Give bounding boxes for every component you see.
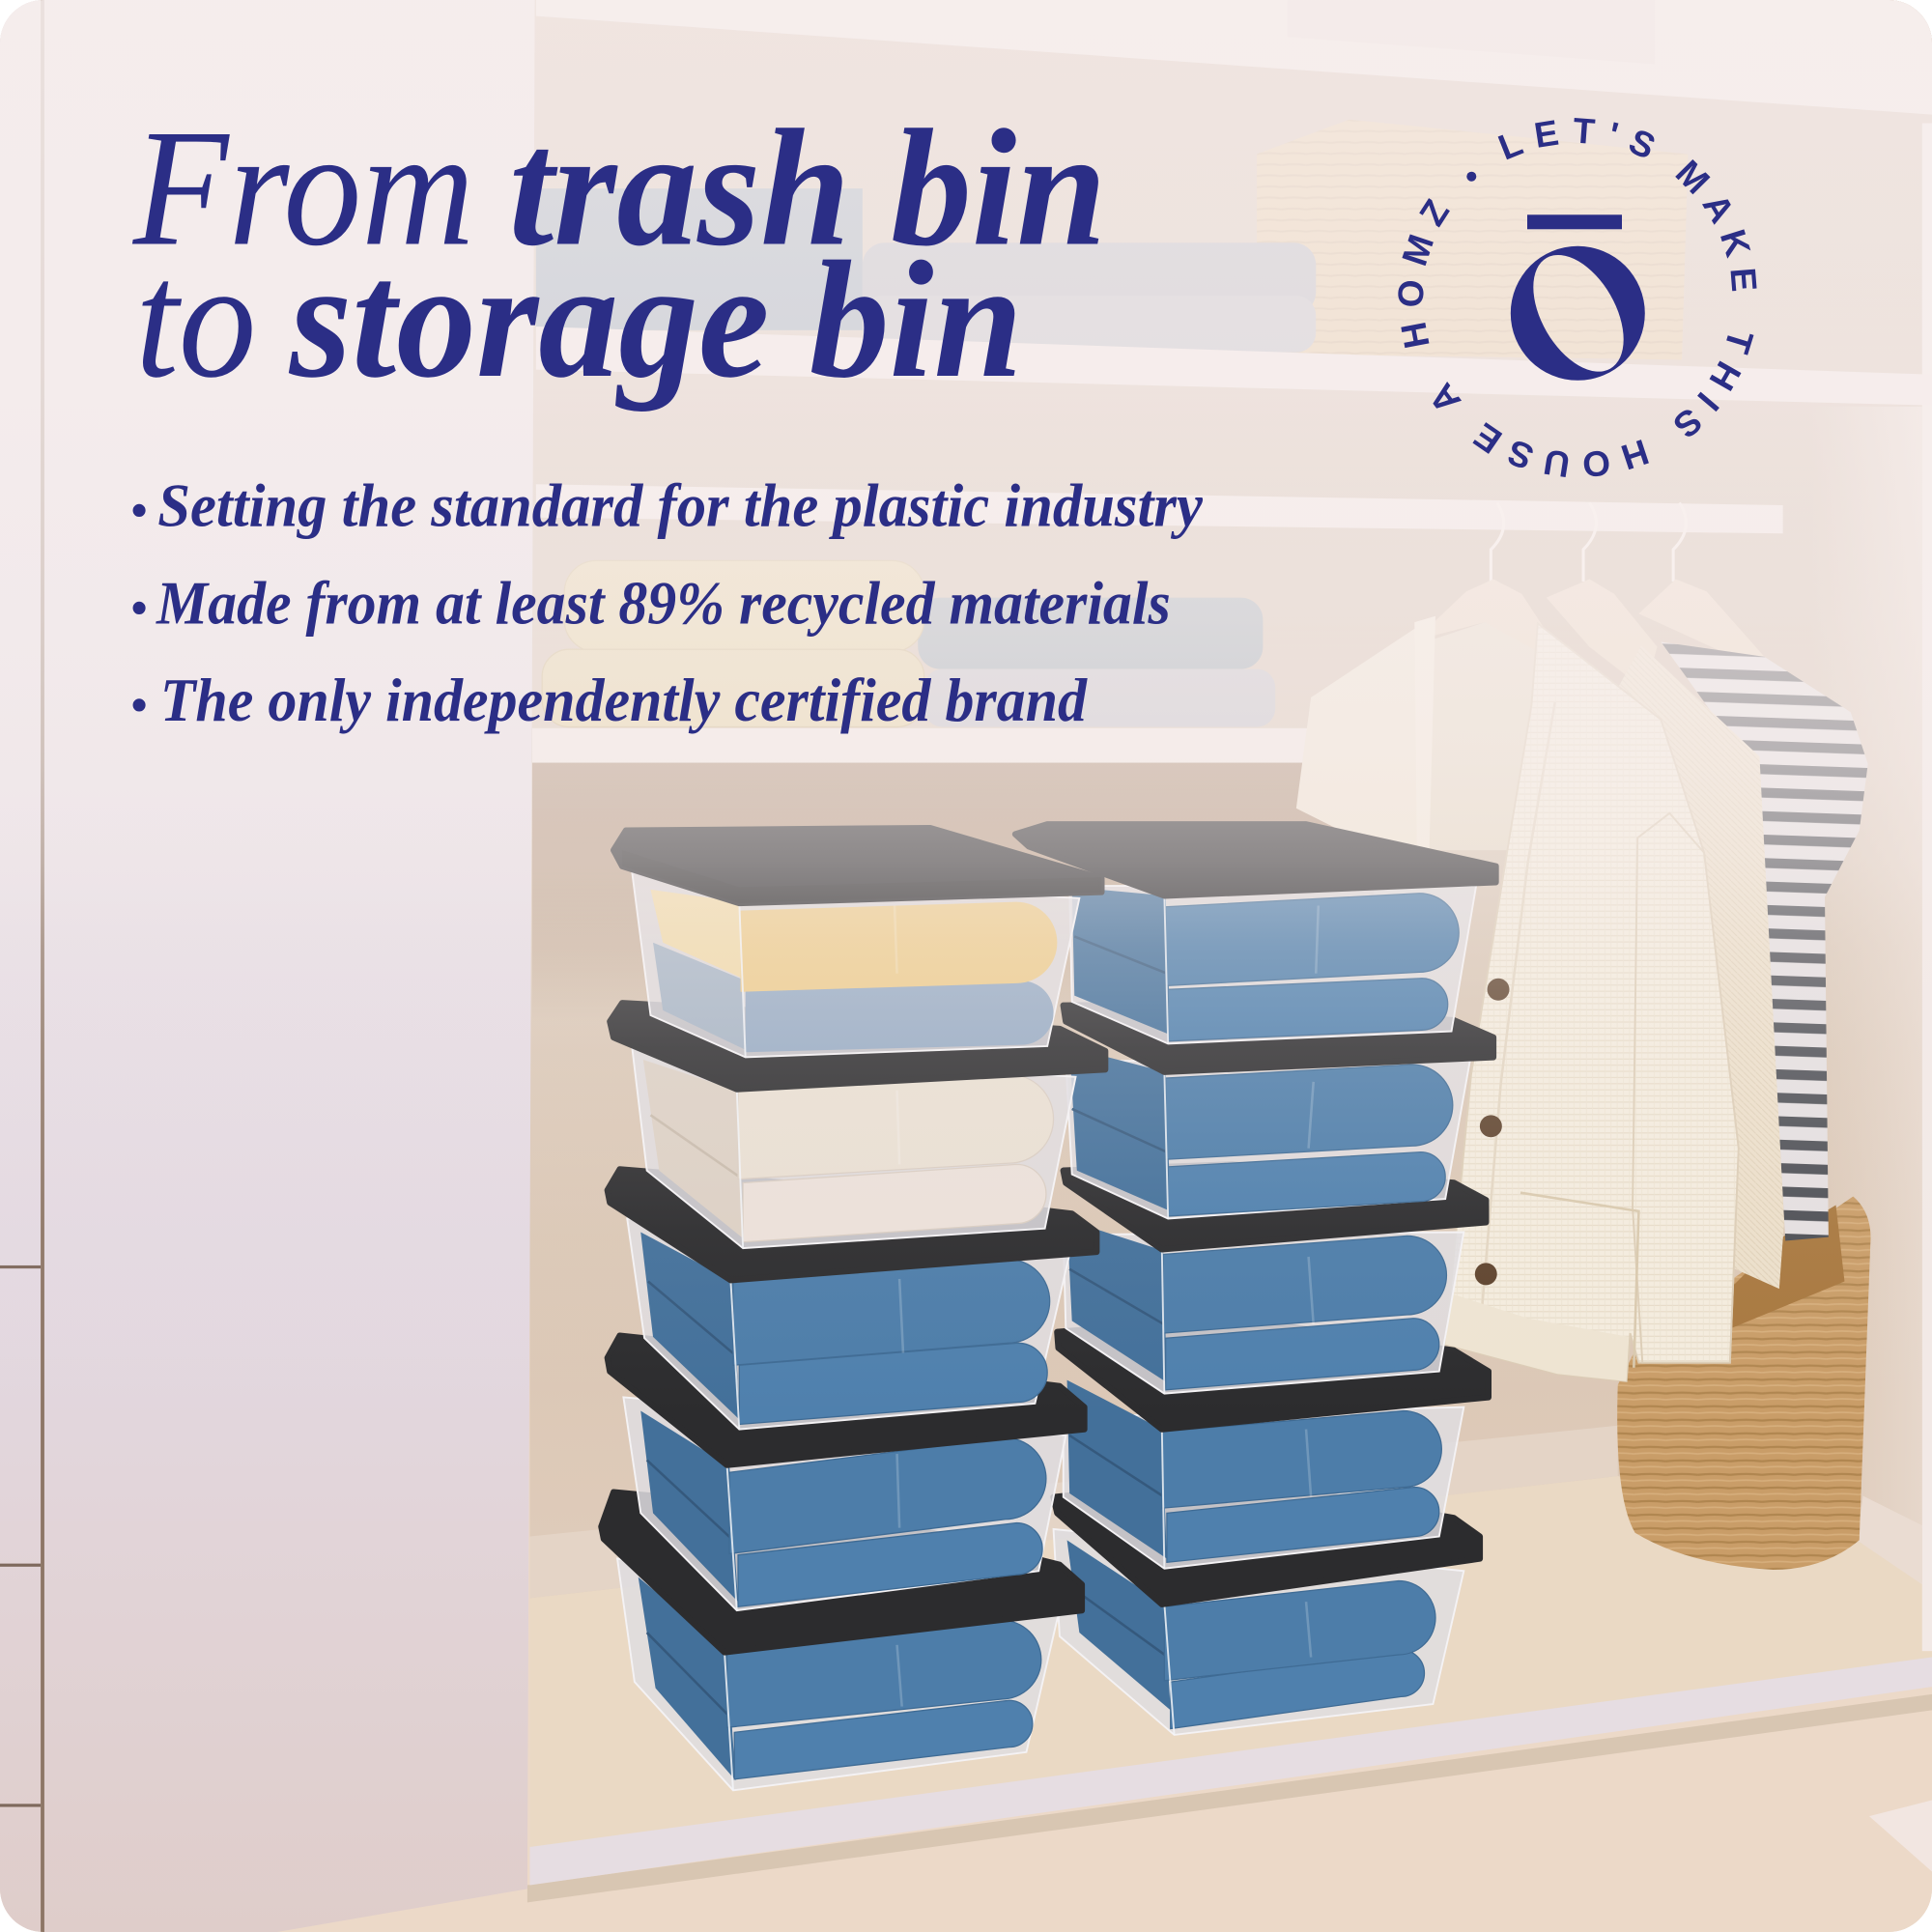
wardrobe left strip (0, 0, 45, 1932)
upper shelf folded clothes and woven basket (536, 120, 1688, 359)
right bin 1 (1015, 824, 1495, 1043)
middle shelf (532, 728, 1374, 763)
closet floor (529, 1476, 1932, 1847)
circular brand badge (1398, 118, 1756, 477)
cardigan sleeve (1633, 813, 1739, 1363)
left bin 2 (610, 1003, 1105, 1248)
cardigan button band (1482, 702, 1555, 1304)
bullet list (130, 471, 1204, 734)
badge dot (1466, 172, 1476, 182)
bins: left stack (601, 828, 1105, 1790)
logo macron bar (1527, 214, 1622, 229)
right bin 4 (1057, 1319, 1489, 1569)
top shelf and upper cupboard (536, 0, 1932, 115)
wardrobe door (44, 0, 535, 1932)
bullet 3: The only independently certified brand (160, 666, 1088, 734)
right bin 2 (1064, 1005, 1493, 1218)
left bin 5 (601, 1492, 1082, 1790)
left bin 1 lid front lip (622, 850, 1101, 903)
cardigan buttons (1475, 979, 1509, 1285)
bullet 2: Made from at least 89% recycled materials (156, 568, 1171, 637)
closet back wall (529, 0, 1932, 1614)
hanger hooks (1491, 502, 1686, 582)
bins: right stack (1015, 824, 1495, 1735)
wooden hangers (1490, 580, 1675, 582)
title line 2: to (135, 226, 256, 412)
right bin 5 (1054, 1479, 1480, 1735)
left bin 3 (608, 1169, 1096, 1430)
striped shirt (1661, 642, 1868, 1240)
title line 1: trash bin (509, 95, 1106, 281)
title line 1 (132, 95, 1106, 281)
hanging rail (536, 484, 1783, 533)
left bin 4 (608, 1336, 1084, 1610)
title line 2: storage bin (289, 226, 1023, 412)
right bin 3 (1064, 1164, 1486, 1394)
back cardigan (1619, 659, 1784, 1289)
bullet 2: • (130, 582, 147, 634)
bullet 1: • (130, 486, 147, 537)
cardigan hem ribbing (1445, 1293, 1629, 1381)
title (132, 95, 1106, 412)
cardigan pocket (1520, 1193, 1638, 1368)
rope basket (1617, 1197, 1871, 1570)
badge ring text: LET'SMAKE THISHOUSEAHOMZ (1398, 118, 1756, 477)
baseboards (529, 1426, 1922, 1598)
title line 1: From (132, 95, 474, 281)
front cardigan (1296, 616, 1739, 1381)
right side panel (1922, 124, 1932, 1651)
upper shelf (536, 327, 1932, 406)
bullet 3: • (130, 680, 147, 731)
logo letter o (1511, 246, 1645, 381)
middle shelf folded clothes (542, 560, 1275, 727)
outer floor and closet plinth (527, 1658, 1932, 1932)
left bin 1 (613, 828, 1101, 1057)
bullet 1: Setting the standard for the plastic industry (157, 471, 1204, 540)
